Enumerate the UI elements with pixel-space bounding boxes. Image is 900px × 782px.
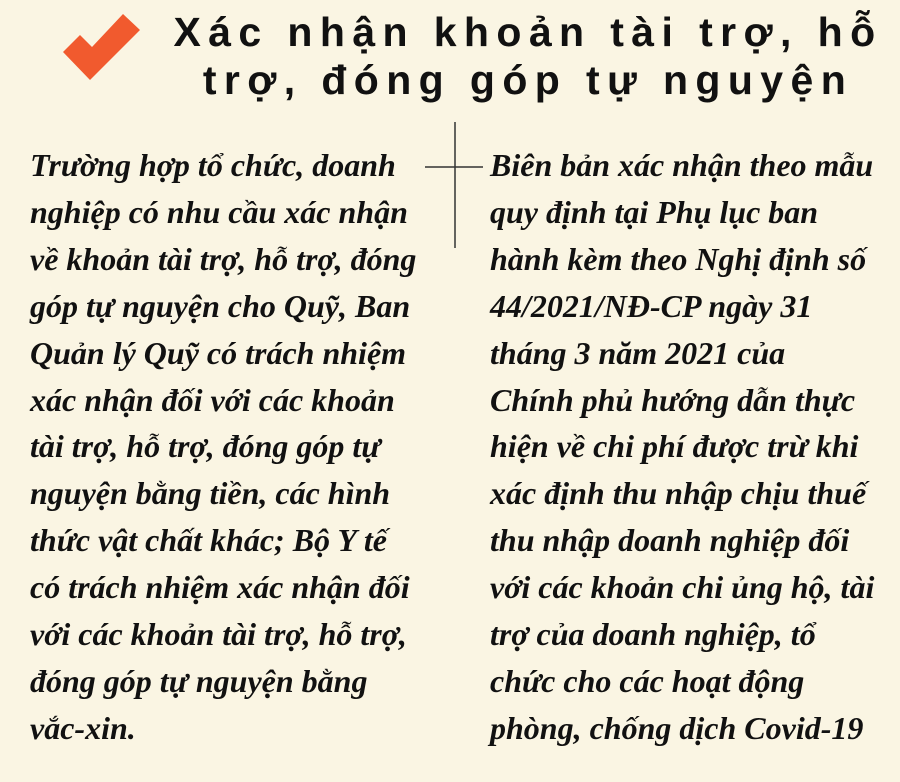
text block: left column: Trường hợp tổ chức, doanh [30,147,396,183]
text block: left column: với các khoản tài trợ, hỗ trợ, [30,616,407,652]
title: trợ, đóng góp tự nguyện [203,57,853,103]
title [173,9,883,103]
text block: left column [29,147,416,746]
text block: right column: tháng 3 năm 2021 của [490,335,785,371]
text block: right column: hành kèm theo Nghị định số [490,241,866,277]
text block: left column: đóng góp tự nguyện bằng [30,663,367,699]
text block: left column: vắc-xin. [30,710,136,746]
divider cross [425,122,483,248]
text block: right column: chức cho các hoạt động [490,663,804,699]
text block: left column: thức vật chất khác; Bộ Y tế [30,522,387,558]
text block: right column: xác định thu nhập chịu thuế [490,475,866,511]
text block: left column: góp tự nguyện cho Quỹ, Ban [30,288,410,324]
text block: right column: quy định tại Phụ lục ban [490,194,818,230]
text block: right column: 44/2021/NĐ-CP ngày 31 [490,288,812,324]
text block: left column: tài trợ, hỗ trợ, đóng góp tự [30,428,380,464]
icon: checkmark [63,14,140,80]
text block: right column: trợ của doanh nghiệp, tổ [490,616,816,652]
text block: right column: Chính phủ hướng dẫn thực [490,382,855,418]
text block: right column: thu nhập doanh nghiệp đối [490,522,849,558]
text block: left column: về khoản tài trợ, hỗ trợ, đóng [30,241,416,277]
text block: left column: Quản lý Quỹ có trách nhiệm [30,335,406,371]
text block: right column: với các khoản chi ủng hộ, tài [490,569,874,605]
text block: left column: xác nhận đối với các khoản [30,382,395,418]
text block: left column: nguyện bằng tiền, các hình [30,475,390,511]
text block: left column: có trách nhiệm xác nhận đối [30,569,410,605]
title: Xác nhận khoản tài trợ, hỗ [173,9,883,55]
text block: left column: nghiệp có nhu cầu xác nhận [30,194,408,230]
text block: right column [488,147,874,746]
text block: right column: hiện về chi phí được trừ khi [490,428,858,464]
text block: right column: phòng, chống dịch Covid-19 [490,710,863,746]
text block: right column: Biên bản xác nhận theo mẫu [490,147,873,183]
